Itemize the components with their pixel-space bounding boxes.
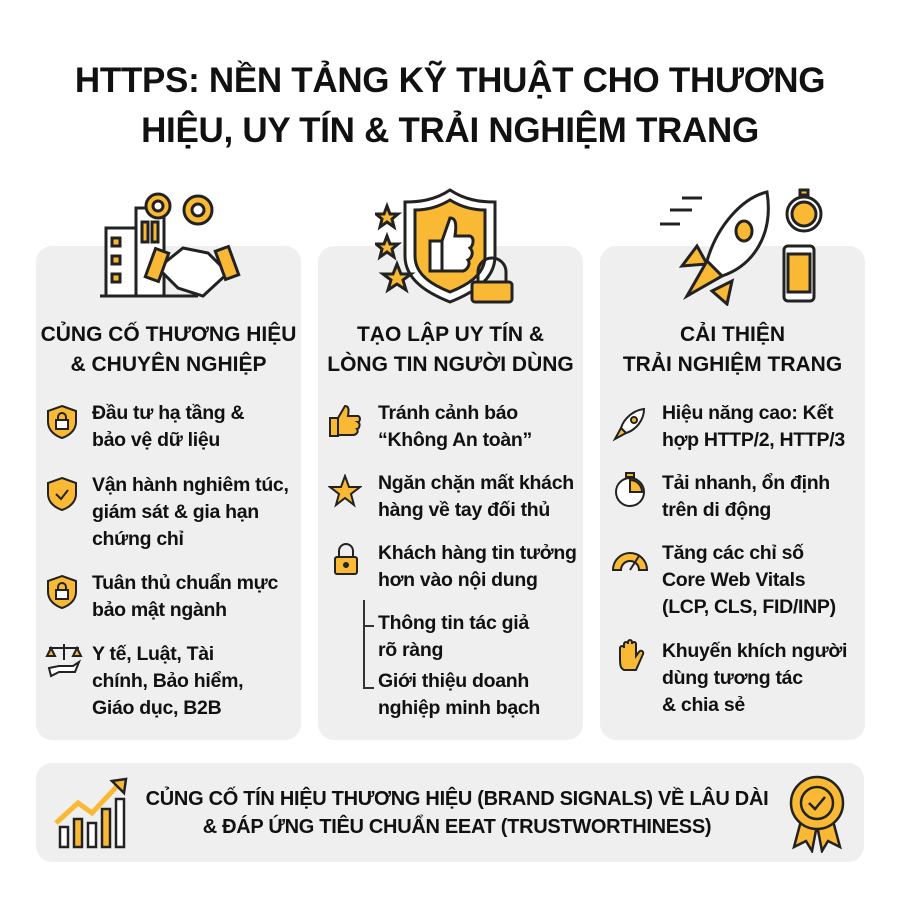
item: trust content: hơn vào nội dung xyxy=(378,569,538,591)
heading: experience: CẢI THIỆN xyxy=(680,323,785,346)
icon: shield check xyxy=(47,477,77,511)
icon: rocket stopwatch phone xyxy=(660,188,822,306)
item: core web vitals xyxy=(662,542,836,618)
item: performance: Hiệu năng cao: Kết xyxy=(662,402,833,424)
item: operate: giám sát & gia hạn xyxy=(92,501,259,523)
item: operate: chứng chỉ xyxy=(92,528,184,550)
panel: trust xyxy=(318,246,583,740)
icon: growth chart xyxy=(54,778,128,848)
item: engagement xyxy=(662,640,847,716)
title: HTTPS: NỀN TẢNG KỸ THUẬT CHO THƯƠNG xyxy=(75,61,825,100)
item: operate: Vận hành nghiêm túc, xyxy=(92,474,289,496)
icon: shield thumbs lock xyxy=(375,188,514,304)
item: author info xyxy=(378,612,530,661)
icon: scales hand xyxy=(45,644,83,678)
icon: star xyxy=(328,474,362,508)
icon: shield lock 2 xyxy=(47,575,77,609)
item: core web vitals: Core Web Vitals xyxy=(662,569,805,591)
item: sectors: chính, Bảo hiểm, xyxy=(92,670,243,692)
item: core web vitals: (LCP, CLS, FID/INP) xyxy=(662,596,836,618)
item: trust content xyxy=(378,542,577,591)
heading: trust xyxy=(327,322,574,376)
item: engagement: dùng tương tác xyxy=(662,667,803,689)
banner text xyxy=(146,786,768,838)
icon: padlock xyxy=(334,543,358,575)
item: performance xyxy=(662,402,845,451)
icon: buildings handshake xyxy=(100,192,241,298)
item: performance: hợp HTTP/2, HTTP/3 xyxy=(662,429,845,451)
item: fast loading: trên di động xyxy=(662,499,771,521)
icon: award badge xyxy=(790,776,844,853)
item: comply xyxy=(92,572,278,621)
item: operate xyxy=(92,474,289,550)
item: invest: bảo vệ dữ liệu xyxy=(92,429,220,451)
item: fast loading xyxy=(662,472,830,521)
heading: experience: TRẢI NGHIỆM TRANG xyxy=(623,353,842,376)
banner text: & ĐÁP ỨNG TIÊU CHUẨN EEAT (TRUSTWORTHINESS) xyxy=(203,816,711,838)
item: prevent loss: Ngăn chặn mất khách xyxy=(378,472,574,494)
item: sectors xyxy=(92,643,243,719)
item: business intro xyxy=(378,670,540,719)
item: avoid warning: Tránh cảnh báo xyxy=(378,402,518,424)
item: author info: rõ ràng xyxy=(378,639,443,661)
heading: experience xyxy=(623,322,842,376)
heading: trust: LÒNG TIN NGƯỜI DÙNG xyxy=(327,353,574,376)
item: sectors: Giáo dục, B2B xyxy=(92,697,221,719)
heading: brand xyxy=(41,322,296,376)
item: fast loading: Tải nhanh, ổn định xyxy=(662,472,830,494)
item: business intro: nghiệp minh bạch xyxy=(378,697,540,719)
item: comply: Tuân thủ chuẩn mực xyxy=(92,572,278,594)
icon: stopwatch xyxy=(615,472,645,507)
item: sectors: Y tế, Luật, Tài xyxy=(92,643,214,665)
item: trust content: Khách hàng tin tưởng xyxy=(378,542,577,564)
item: invest xyxy=(92,402,244,451)
icon: small rocket xyxy=(612,408,645,442)
panel: brand xyxy=(36,246,301,740)
item: avoid warning: “Không An toàn” xyxy=(378,429,532,451)
banner xyxy=(36,763,864,862)
heading: brand: & CHUYÊN NGHIỆP xyxy=(70,353,267,376)
icon: shield lock 1 xyxy=(47,405,77,439)
item: prevent loss xyxy=(378,472,574,521)
heading: trust: TẠO LẬP UY TÍN & xyxy=(357,323,544,346)
item: avoid warning xyxy=(378,402,532,451)
item: engagement: Khuyến khích người xyxy=(662,640,847,662)
item: author info: Thông tin tác giả xyxy=(378,612,529,634)
heading: brand: CỦNG CỐ THƯƠNG HIỆU xyxy=(41,323,296,346)
title xyxy=(75,60,825,150)
item: invest: Đầu tư hạ tầng & xyxy=(92,402,244,424)
banner text: CỦNG CỐ TÍN HIỆU THƯƠNG HIỆU (BRAND SIGNALS) VỀ LÂU DÀI xyxy=(146,788,768,810)
sub-items connector xyxy=(363,600,374,689)
icon: hand xyxy=(619,639,644,671)
item: core web vitals: Tăng các chỉ số xyxy=(662,542,804,564)
icon: thumbs up xyxy=(329,405,361,437)
panel: experience xyxy=(600,246,865,740)
icon: gauge xyxy=(612,552,648,571)
item: comply: bảo mật ngành xyxy=(92,599,227,621)
item: engagement: & chia sẻ xyxy=(662,694,745,716)
title: HIỆU, UY TÍN & TRẢI NGHIỆM TRANG xyxy=(141,111,759,150)
item: business intro: Giới thiệu doanh xyxy=(378,670,529,692)
item: prevent loss: hàng về tay đối thủ xyxy=(378,499,550,521)
